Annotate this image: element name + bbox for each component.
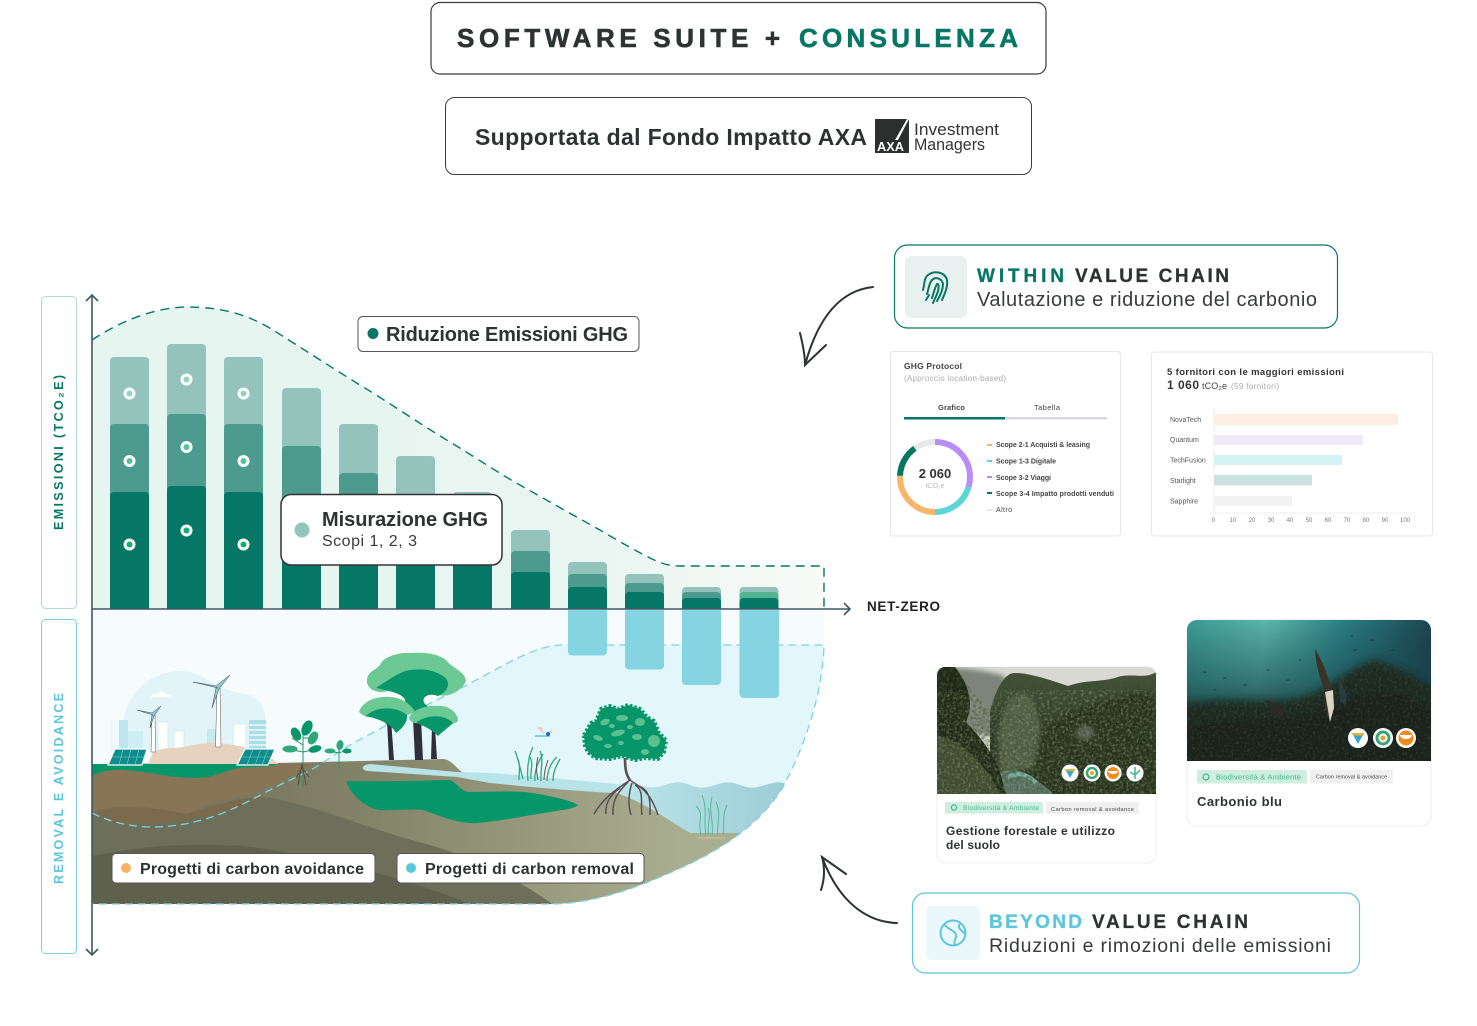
axis label panel: emissions: EMISSIONI (TCO₂E) (52, 375, 66, 530)
legend: Altro (996, 507, 1012, 514)
illustration: dragonfly (535, 727, 552, 736)
area: removal and avoidance background (92, 609, 824, 904)
bar chart: suppliers: Quantum (1170, 437, 1199, 444)
illustration: sea water (615, 782, 800, 840)
legend label: GHG measurement: Misurazione GHG (322, 509, 488, 531)
illustration: dashed removal outline (92, 645, 824, 904)
panel: GHG protocol card: (Approccio location-based) (904, 374, 1006, 383)
badges (1348, 728, 1416, 748)
icon: fingerprint (905, 256, 967, 318)
bar chart: suppliers: 50 (1306, 518, 1313, 524)
tabs: Grafico (938, 403, 965, 412)
axis label panel: emissions (42, 296, 76, 608)
panel: top suppliers card: (59 fornitori) (1231, 382, 1279, 391)
panel: within value chain: Valutazione e riduzione del carbonio (977, 289, 1317, 311)
legend label: GHG emissions reduction: Riduzione Emissioni GHG (386, 324, 628, 346)
legend: Scope 1-3 Digitale (996, 458, 1056, 466)
callout: supported by AXA impact fund: Supportata dal Fondo Impatto AXA (475, 124, 867, 150)
panel: blue carbon project card (1180, 620, 1440, 826)
bar chart: suppliers: 0 (1212, 518, 1216, 524)
tabs: Tabella (1034, 403, 1061, 412)
wind turbines (137, 675, 230, 752)
bar chart: suppliers: 90 (1382, 518, 1389, 524)
panel: top suppliers card: 1 060 (1167, 378, 1199, 392)
donut chart: 2 060 (919, 466, 951, 481)
sand hill (148, 743, 278, 764)
bar chart: suppliers: 100 (1400, 518, 1411, 524)
panel: top suppliers card: tCO₂e (1202, 381, 1227, 391)
panel: beyond value chain: VALUE CHAIN (1092, 912, 1248, 933)
tag: biodiversity (1197, 770, 1307, 784)
panel: within value chain: WITHIN (977, 266, 1064, 287)
heading: software suite + consulenza: CONSULENZA (799, 23, 1018, 53)
photo: forest valley (937, 667, 1156, 794)
donut chart (900, 442, 970, 512)
illustration: forest trees (359, 653, 466, 760)
fish (1265, 649, 1347, 722)
bars: emissions stacked (110, 344, 778, 632)
icon: AXA logo: AXA (877, 139, 905, 154)
label: net-zero: NET-ZERO (867, 599, 940, 614)
illustration: city with wind turbines and solar panels (108, 671, 278, 765)
city backdrop (122, 671, 266, 750)
area: carbon removal zone (92, 645, 824, 904)
photo: underwater reef (1187, 620, 1431, 761)
legend (987, 442, 1114, 514)
bar chart: suppliers (1170, 407, 1411, 524)
panel: top suppliers card (1152, 352, 1432, 536)
legend label: carbon avoidance projects (112, 854, 375, 883)
legend: Scope 2-1 Acquisti & leasing (996, 442, 1090, 449)
icon: AXA logo (875, 119, 909, 154)
tag: carbon removal and avoidance: Carbon removal & avoidance (1051, 807, 1134, 813)
panel: within value chain: VALUE CHAIN (1075, 266, 1229, 287)
illustration: river (363, 764, 617, 793)
tag: biodiversity: Biodiversità & Ambiente (963, 805, 1039, 812)
solar panels (108, 749, 275, 765)
bar chart: suppliers: NovaTech (1170, 417, 1201, 424)
panel: GHG protocol card (890, 352, 1120, 536)
callout: supported by AXA impact fund (446, 98, 1032, 174)
icon: globe (926, 906, 980, 960)
bar chart: suppliers: Starlight (1170, 478, 1196, 485)
bar chart: suppliers: 60 (1325, 518, 1332, 524)
axis label panel: removal and avoidance (42, 620, 76, 954)
legend label: GHG emissions reduction (358, 316, 639, 352)
legend label: GHG measurement: Scopi 1, 2, 3 (322, 533, 417, 550)
illustration: wetland (346, 780, 578, 823)
cloud (151, 692, 171, 697)
bar markers (124, 374, 250, 550)
panel: GHG protocol card: GHG Protocol (904, 361, 962, 371)
bar chart: suppliers: TechFusion (1170, 458, 1206, 464)
tabs (904, 403, 1107, 420)
panel: beyond value chain (912, 893, 1360, 973)
illustration: mangrove tree (584, 705, 666, 815)
bar chart: suppliers: 30 (1268, 518, 1275, 524)
bar chart: suppliers: 80 (1363, 518, 1370, 524)
arrow: within value chain to chart (800, 287, 873, 365)
illustration: reeds (515, 747, 560, 781)
callout: supported by AXA impact fund: Managers (914, 135, 985, 154)
tag: biodiversity (945, 802, 1043, 814)
area: emissions reduction curve (92, 307, 824, 609)
donut chart: tCO₂e (925, 483, 945, 490)
panel: beyond value chain: Riduzioni e rimozioni delle emissioni (989, 935, 1331, 957)
legend label: GHG measurement (281, 494, 502, 565)
tag: biodiversity: Biodiversità & Ambiente (1216, 772, 1301, 782)
buildings (110, 720, 266, 752)
legend: Scope 3-2 Viaggi (996, 475, 1051, 482)
callout: supported by AXA impact fund: Investment (914, 120, 999, 139)
tag: carbon removal and avoidance (1046, 802, 1139, 814)
panel: blue carbon project card: Carbonio blu (1197, 794, 1282, 809)
bar chart: suppliers: 40 (1287, 518, 1294, 524)
tag: carbon removal and avoidance (1310, 770, 1393, 784)
panel: forest management project card: del suolo (946, 838, 1000, 852)
bar chart: suppliers: 20 (1249, 518, 1256, 524)
panel: within value chain (894, 245, 1338, 328)
bars: removals below net-zero (568, 610, 779, 698)
bar chart: suppliers: 10 (1230, 518, 1237, 524)
illustration: seagrass (696, 795, 727, 838)
axis label panel: removal and avoidance: REMOVAL E AVOIDANCE (52, 693, 66, 884)
heading: software suite + consulenza: SOFTWARE SUITE + (457, 23, 780, 53)
panel: forest management project card (937, 667, 1156, 863)
panel: top suppliers card: 5 fornitori con le maggiori emissioni (1167, 367, 1344, 378)
panel: beyond value chain: BEYOND (989, 912, 1082, 933)
illustration: ground layers (92, 759, 760, 910)
bar chart: suppliers: Sapphire (1170, 498, 1198, 506)
legend label: carbon removal projects (397, 854, 644, 883)
bar chart: suppliers: 70 (1344, 518, 1351, 524)
tag: carbon removal and avoidance: Carbon removal & avoidance (1316, 774, 1387, 780)
illustration: seedlings (282, 719, 352, 787)
chart: emissions trajectory to net-zero (86, 295, 940, 955)
panel: forest management project card: Gestione forestale e utilizzo (946, 824, 1115, 838)
arrow: beyond value chain to chart (821, 857, 897, 923)
legend label: carbon avoidance projects: Progetti di carbon avoidance (140, 861, 364, 878)
legend: Scope 3-4 Impatto prodotti venduti (996, 491, 1114, 498)
axes (86, 295, 850, 955)
heading: software suite + consulenza (431, 2, 1046, 74)
legend label: carbon removal projects: Progetti di carbon removal (425, 861, 634, 878)
badges (1062, 764, 1144, 782)
